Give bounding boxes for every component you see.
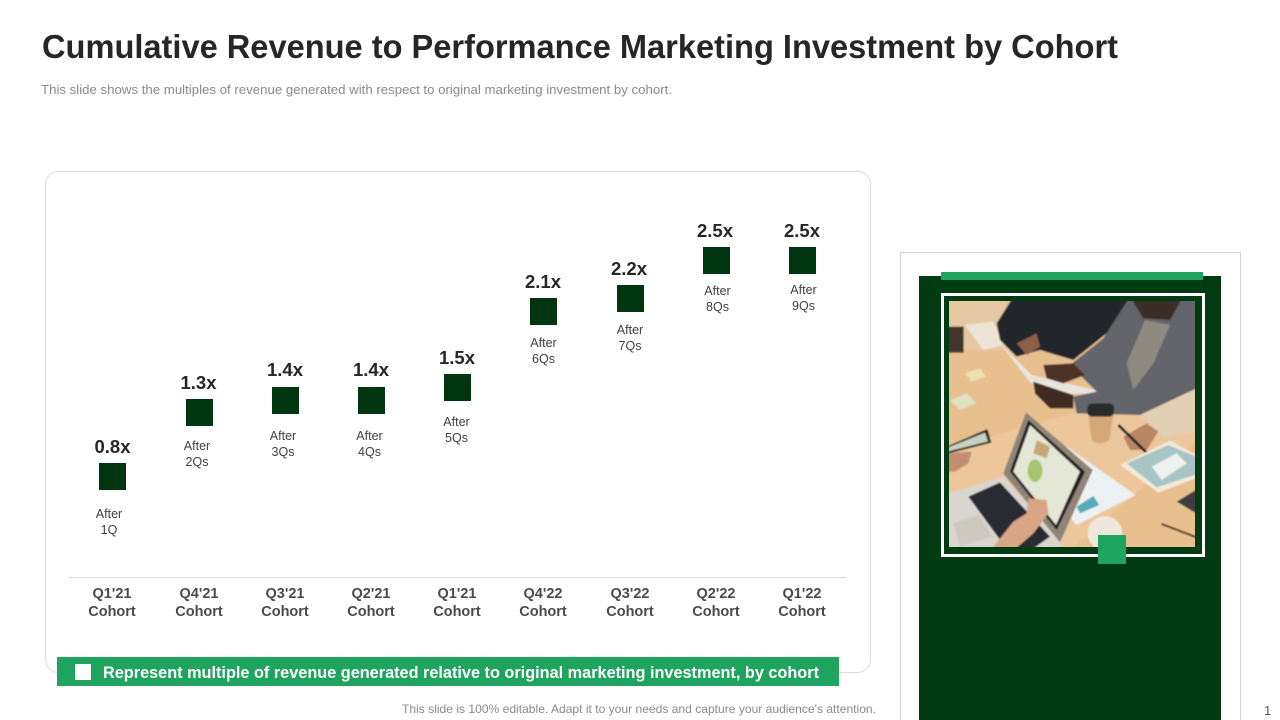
cohort labels: Q1'21 — [438, 586, 476, 602]
dark green backing — [919, 276, 1221, 720]
data point: Q2'21 cohort after 4Qs: 1.4x — [353, 359, 390, 380]
lower table items — [1176, 490, 1195, 514]
cohort labels: Cohort — [347, 604, 395, 620]
green accent square — [1098, 535, 1126, 564]
white photo frame — [942, 294, 1204, 556]
panel: cohort chart — [46, 172, 870, 672]
cohort labels: Q1'22 — [783, 586, 821, 602]
data point: Q4'22 cohort after 6Qs: 2.1x — [525, 271, 562, 292]
subtitle: This slide shows the multiples of revenue generated with respect to original marketing investment by cohort. — [41, 83, 672, 97]
cohort labels: Q2'22 — [697, 586, 735, 602]
green top bar — [941, 272, 1203, 280]
data point: Q3'21 cohort after 3Qs: After — [270, 429, 296, 443]
cohort labels: Cohort — [692, 604, 740, 620]
dark sleeve person — [997, 297, 1130, 360]
data point: Q4'21 cohort after 2Qs — [180, 372, 217, 469]
cohort labels: Q4'21 — [180, 586, 218, 602]
data point: Q1'21 cohort after 5Qs: 1.5x — [439, 347, 476, 368]
cohort labels: Q1'21 — [93, 586, 131, 602]
cohort labels: Q4'22 — [524, 586, 562, 602]
data point: Q2'22 cohort after 8Qs: 2.5x — [697, 220, 734, 241]
data point: Q4'22 cohort after 6Qs — [525, 271, 562, 366]
data point: Q1'22 cohort after 9Qs: 9Qs — [792, 299, 815, 313]
data point: Q2'22 cohort after 8Qs: After — [704, 284, 731, 298]
data point: Q3'22 cohort after 7Qs: 7Qs — [619, 339, 641, 353]
data point: Q3'21 cohort after 3Qs: 1.4x — [267, 359, 304, 380]
data point: Q1'21 cohort after 1Q: After — [96, 507, 122, 521]
cohort labels — [88, 586, 826, 620]
cohort labels: Q3'22 — [611, 586, 649, 602]
data point: Q4'22 cohort after 6Qs: 6Qs — [532, 352, 555, 366]
cohort labels: Cohort — [175, 604, 223, 620]
data point: Q1'21 cohort after 1Q — [94, 436, 131, 537]
data point: Q2'22 cohort after 8Qs — [697, 220, 734, 314]
data point: Q3'21 cohort after 3Qs — [267, 359, 304, 459]
data point: Q3'21 cohort after 3Qs: 3Qs — [272, 445, 294, 459]
data point: Q2'21 cohort after 4Qs: After — [356, 429, 383, 443]
legend banner — [57, 657, 839, 686]
data point: Q4'22 cohort after 6Qs: After — [530, 336, 557, 350]
data point: Q1'21 cohort after 5Qs: 5Qs — [445, 431, 468, 445]
data point: Q2'21 cohort after 4Qs — [353, 359, 390, 459]
data point: Q1'21 cohort after 5Qs — [439, 347, 476, 445]
data point: Q3'22 cohort after 7Qs: 2.2x — [611, 258, 648, 279]
paper report — [1066, 446, 1136, 526]
phone and hand — [947, 429, 991, 454]
data point: Q3'22 cohort after 7Qs: After — [617, 323, 643, 337]
cohort labels: Cohort — [778, 604, 826, 620]
title: Cumulative Revenue to Performance Marketing Investment by Cohort — [42, 28, 1118, 65]
coffee cup — [1088, 415, 1113, 443]
cream sleeve and hand — [1140, 388, 1195, 438]
cohort labels: Cohort — [261, 604, 309, 620]
data point: Q1'22 cohort after 9Qs: 2.5x — [784, 220, 821, 241]
data point: Q2'22 cohort after 8Qs: 8Qs — [706, 300, 729, 314]
cohort labels: Q2'21 — [352, 586, 390, 602]
data point: Q2'21 cohort after 4Qs: 4Qs — [358, 445, 381, 459]
photo: team meeting around a table — [943, 295, 1202, 553]
data point: Q1'21 cohort after 1Q: 0.8x — [94, 436, 131, 457]
cohort labels: Cohort — [433, 604, 481, 620]
hand on laptop — [992, 498, 1049, 547]
data point: Q1'21 cohort after 5Qs: After — [443, 415, 470, 429]
data point: Q4'21 cohort after 2Qs: 1.3x — [180, 372, 217, 393]
gray blazer person — [1070, 297, 1200, 415]
cohort labels: Cohort — [606, 604, 654, 620]
cohort labels: Q3'21 — [266, 586, 304, 602]
cohort labels: Cohort — [88, 604, 136, 620]
data point: Q1'22 cohort after 9Qs — [784, 220, 821, 313]
legend text: Represent multiple of revenue generated relative to original marketing investment, by cohort — [103, 663, 819, 682]
panel: photo card — [900, 252, 1240, 720]
page number: 1 — [1264, 703, 1271, 718]
data point: Q3'22 cohort after 7Qs — [611, 258, 648, 353]
cohort labels: Cohort — [519, 604, 567, 620]
tablet — [1120, 441, 1200, 493]
data point: Q1'22 cohort after 9Qs: After — [790, 283, 817, 297]
legend swatch — [75, 664, 91, 680]
data point: Q1'21 cohort after 1Q: 1Q — [101, 523, 118, 537]
data point: Q4'21 cohort after 2Qs: After — [184, 439, 210, 453]
laptop — [949, 476, 1061, 547]
footer note: This slide is 100% editable. Adapt it to your needs and capture your audience's attention. — [402, 702, 876, 716]
axis line — [69, 576, 846, 578]
data point: Q4'21 cohort after 2Qs: 2Qs — [186, 455, 208, 469]
